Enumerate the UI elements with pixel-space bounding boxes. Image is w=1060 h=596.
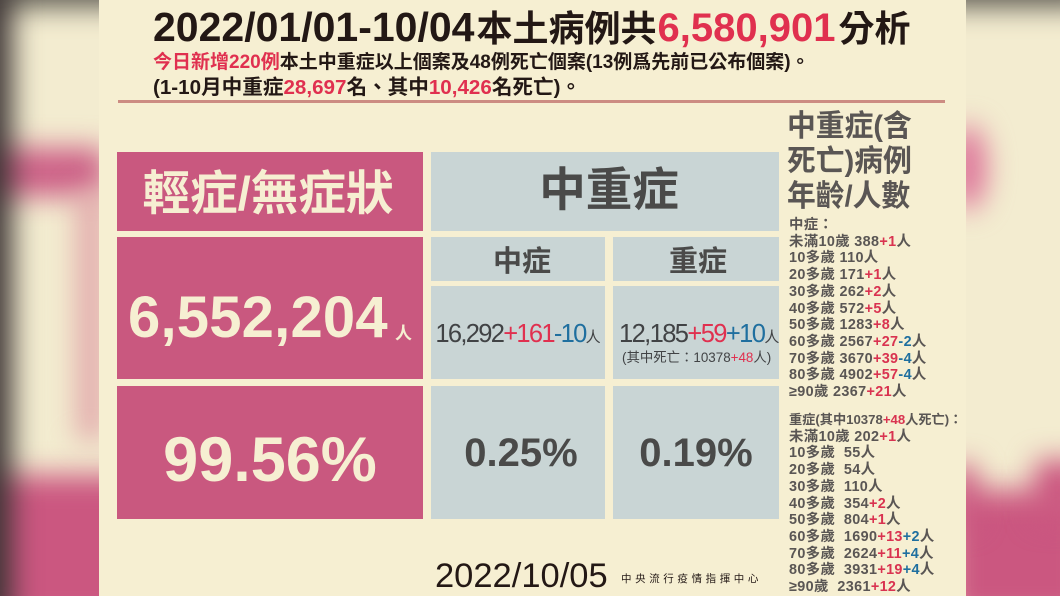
severe age list: 60多歲 1690+13+2人 — [789, 529, 935, 545]
severe count — [613, 286, 779, 379]
severe age list: 10多歲 55人 — [789, 445, 875, 461]
severe age list: 80多歲 3931+19+4人 — [789, 562, 935, 578]
moderate age list — [789, 216, 927, 400]
severe age list: 30多歲 110人 — [789, 479, 883, 495]
severe deaths note: (其中死亡：10378+48人) — [622, 350, 771, 365]
moderate age list: 70多歲 3670+39-4人 — [789, 351, 927, 367]
subheading: moderate: 中症 — [493, 246, 551, 278]
subheading: moderate — [431, 237, 605, 281]
panel: mild or asymptomatic column — [117, 152, 423, 519]
moderate age list: 20多歲 171+1人 — [789, 267, 896, 283]
heading: mild or asymptomatic: 輕症/無症狀 — [143, 168, 393, 221]
heading: moderate and severe — [431, 152, 779, 231]
age panel heading: 年齡/人數 — [787, 180, 910, 213]
severe age list: 重症(其中10378+48人死亡)： — [789, 412, 962, 427]
heading: mild or asymptomatic — [117, 152, 423, 231]
date: 2022/10/05 — [435, 557, 608, 595]
severe age list: 50多歲 804+1人 — [789, 512, 901, 528]
moderate percentage: 0.25% — [464, 431, 578, 475]
severe age list: 20多歲 54人 — [789, 462, 875, 478]
severe percentage: 0.19% — [639, 431, 753, 475]
panel: moderate and severe — [431, 152, 779, 519]
severe count: 12,185+59+10人 — [619, 320, 779, 348]
summary text: 今日新增220例本土中重症以上個案及48例死亡個案(13例爲先前已公布個案)。 — [153, 52, 810, 73]
age panel heading: 中重症(含 — [787, 110, 912, 143]
heading: moderate and severe: 中重症 — [539, 164, 679, 216]
moderate age list: 中症： — [789, 217, 833, 233]
moderate age list: 30多歲 262+2人 — [789, 284, 896, 300]
mild percentage — [117, 386, 423, 519]
source: CECC: 中央流行疫情指揮中心 — [621, 573, 762, 585]
summary text: (1-10月中重症28,697名、其中10,426名死亡)。 — [153, 76, 581, 99]
moderate age list: 80多歲 4902+57-4人 — [789, 367, 927, 383]
summary text — [153, 52, 810, 99]
severe percentage — [613, 386, 779, 519]
severe age list: ≥90歲 2361+12人 — [789, 579, 911, 595]
moderate age list: 10多歲 110人 — [789, 250, 879, 266]
moderate age list: 40多歲 572+5人 — [789, 301, 896, 317]
age panel heading: 死亡)病例 — [787, 145, 912, 178]
header divider — [118, 100, 945, 103]
severe age list: 40多歲 354+2人 — [789, 496, 901, 512]
moderate age list: 50多歲 1283+8人 — [789, 317, 905, 333]
severe age list: 70多歲 2624+11+4人 — [789, 546, 934, 562]
title: 2022/01/01-10/04本土病例共6,580,901分析 — [153, 4, 910, 50]
severe age list — [789, 412, 962, 595]
severe age list: 未滿10歲 202+1人 — [789, 429, 911, 445]
moderate count — [431, 286, 605, 379]
mild case count — [117, 237, 423, 379]
mild case count: 6,552,204 — [128, 285, 388, 350]
moderate percentage — [431, 386, 605, 519]
subheading: severe — [613, 237, 779, 281]
moderate age list: ≥90歲 2367+21人 — [789, 384, 907, 400]
unit: people: 人 — [395, 324, 412, 343]
subheading: severe: 重症 — [669, 246, 727, 278]
mild percentage: 99.56% — [163, 424, 377, 494]
moderate count: 16,292+161-10人 — [435, 320, 601, 348]
age panel heading — [787, 110, 912, 213]
moderate age list: 60多歲 2567+27-2人 — [789, 334, 927, 350]
moderate age list: 未滿10歲 388+1人 — [789, 234, 911, 250]
